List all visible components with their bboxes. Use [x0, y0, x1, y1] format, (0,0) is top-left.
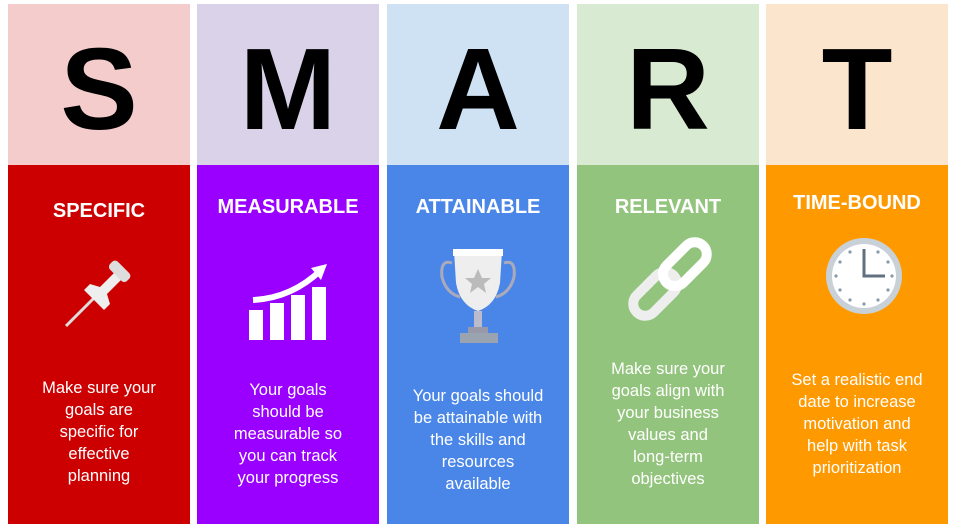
letter A: A: [436, 24, 520, 154]
heading: MEASURABLE: [217, 196, 359, 218]
heading: TIME-BOUND: [793, 192, 921, 214]
text: your progress: [238, 469, 338, 487]
text: goals are: [65, 401, 133, 419]
letter S: S: [60, 24, 138, 154]
text: specific for: [60, 423, 138, 441]
letter R: R: [626, 24, 710, 154]
text: [611, 360, 725, 488]
icon: pushpin: [65, 260, 130, 327]
letter T: [766, 4, 948, 165]
text: long-term: [633, 448, 703, 466]
icon: clock: [826, 238, 902, 314]
text: help with task: [807, 437, 907, 455]
text: [42, 379, 156, 485]
text: you can track: [239, 447, 337, 465]
icon: chain link: [628, 237, 712, 321]
body: specific: [8, 165, 190, 524]
panel: measurable: [197, 4, 379, 524]
body: measurable: [197, 165, 379, 524]
icon: bar chart: [249, 264, 327, 340]
heading: RELEVANT: [615, 196, 721, 218]
letter M: M: [240, 24, 336, 154]
letter S: [8, 4, 190, 165]
text: [234, 381, 342, 487]
text: resources: [442, 453, 514, 471]
text: should be: [252, 403, 324, 421]
text: measurable so: [234, 425, 342, 443]
body: time-bound: [766, 165, 948, 524]
text: date to increase: [798, 393, 916, 411]
panel: specific: [8, 4, 190, 524]
panel: relevant: [577, 4, 759, 524]
panel: time-bound: [766, 4, 948, 524]
text: prioritization: [813, 459, 901, 477]
text: the skills and: [430, 431, 526, 449]
text: Set a realistic end: [791, 371, 923, 389]
text: your business: [617, 404, 719, 422]
text: Your goals should: [413, 387, 543, 405]
heading: SPECIFIC: [53, 200, 145, 222]
heading: ATTAINABLE: [416, 196, 540, 218]
letter M: [197, 4, 379, 165]
text: values and: [628, 426, 708, 444]
text: motivation and: [803, 415, 911, 433]
text: available: [445, 475, 511, 493]
text: effective: [68, 445, 130, 463]
text: goals align with: [612, 382, 724, 400]
icon: trophy: [440, 249, 516, 343]
letter R: [577, 4, 759, 165]
letter A: [387, 4, 569, 165]
text: objectives: [631, 470, 705, 488]
text: Make sure your: [611, 360, 725, 378]
text: planning: [68, 467, 130, 485]
text: Make sure your: [42, 379, 156, 397]
panel: attainable: [387, 4, 569, 524]
body: attainable: [387, 165, 569, 524]
text: be attainable with: [414, 409, 542, 427]
body: relevant: [577, 165, 759, 524]
text: Your goals: [249, 381, 327, 399]
text: [413, 387, 543, 493]
text: [791, 371, 923, 477]
letter T: T: [822, 24, 892, 154]
